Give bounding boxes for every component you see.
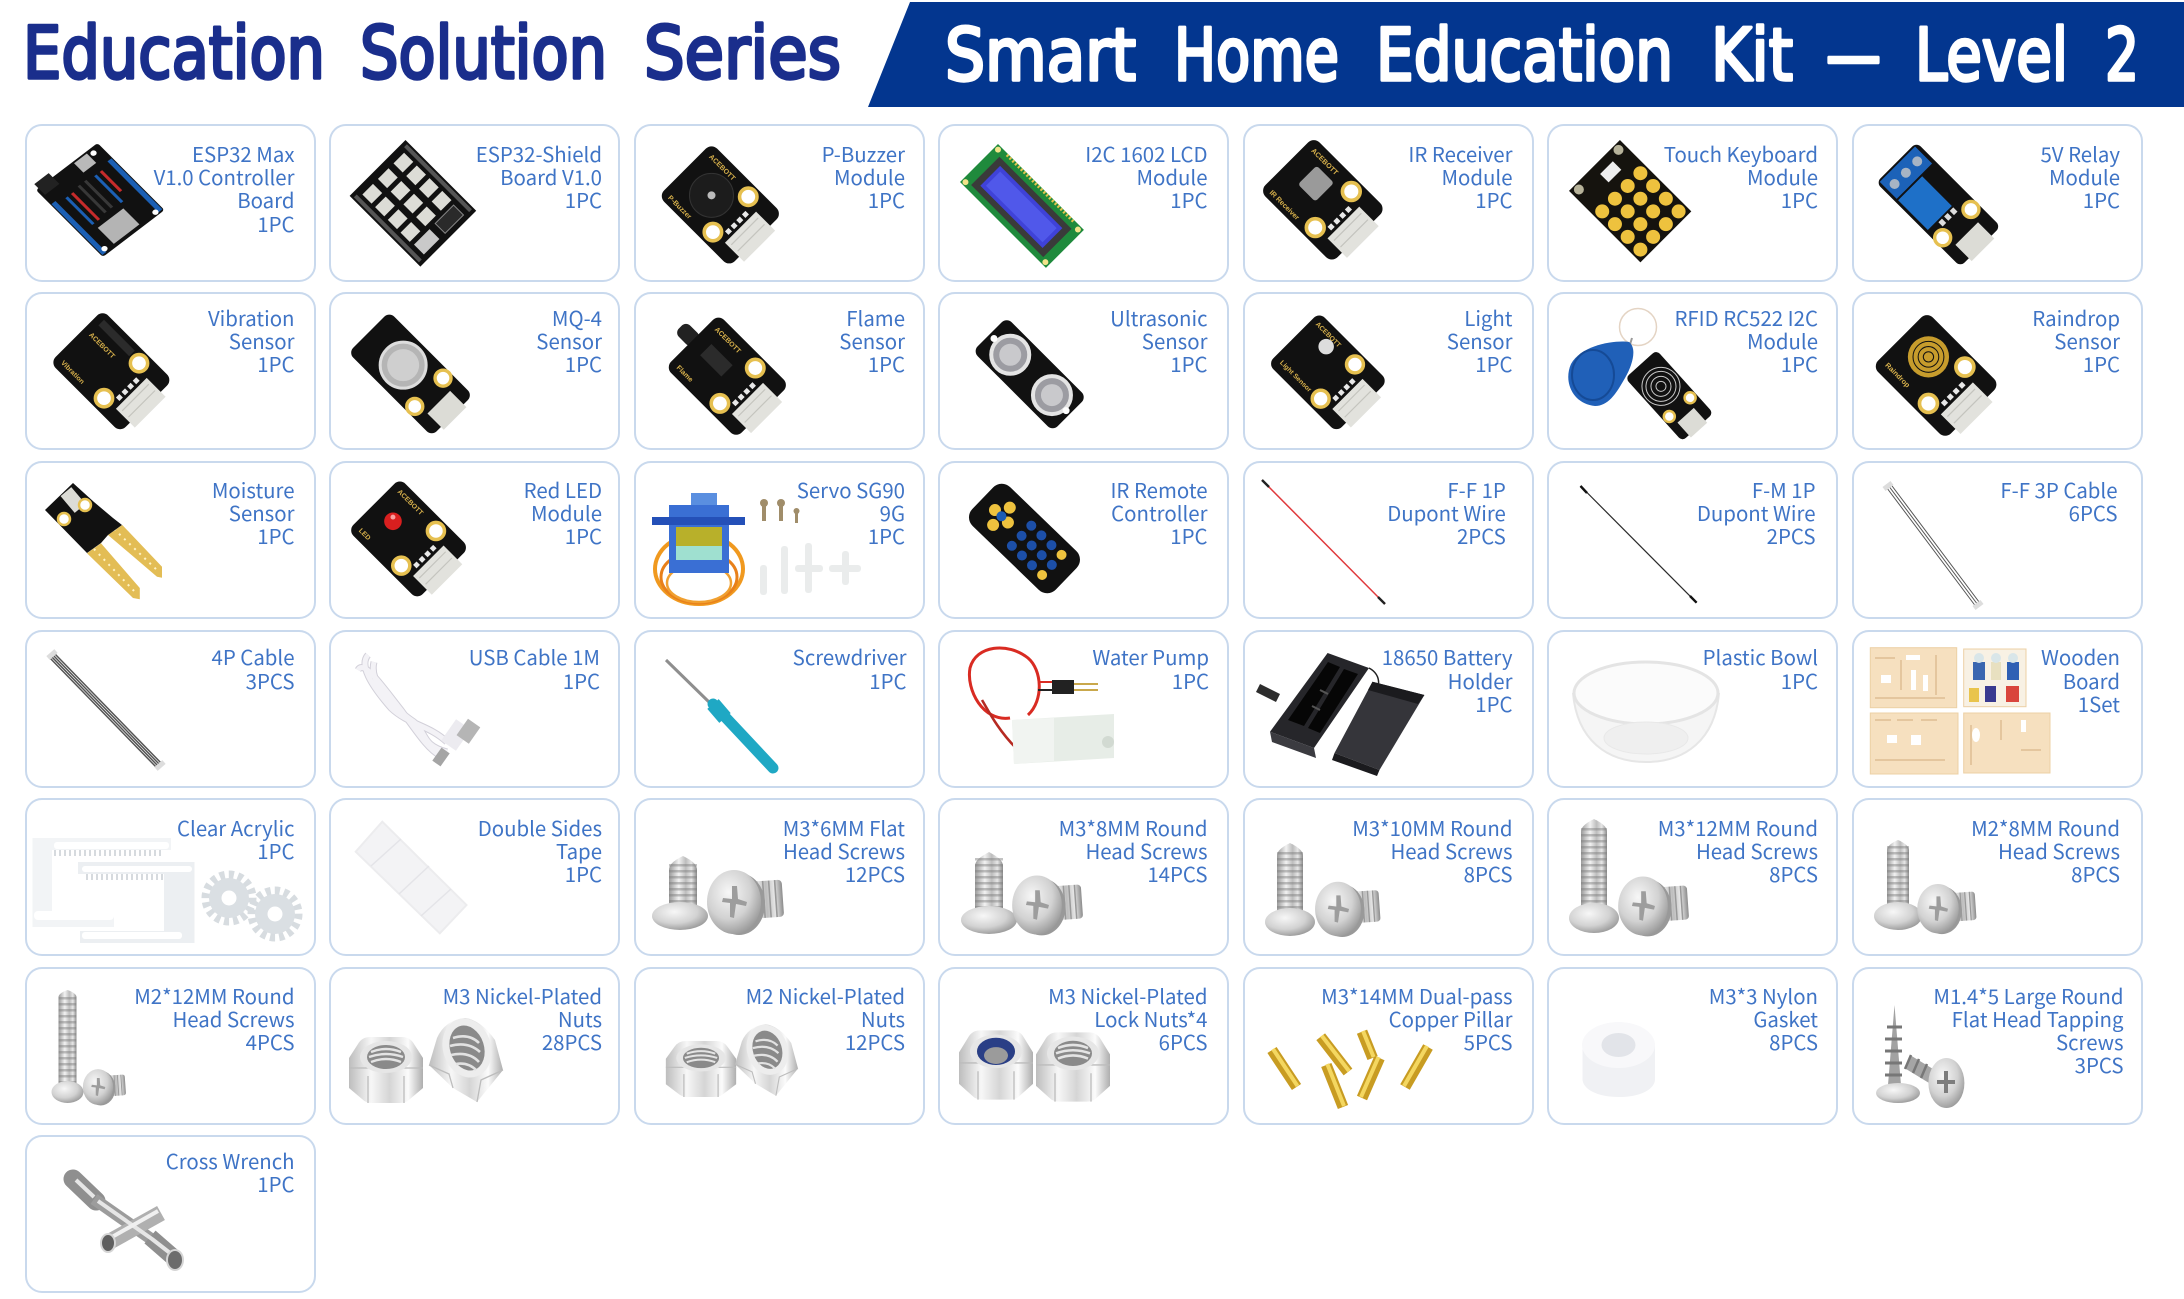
icon: IR receiver board: ACEBOTT <box>1310 146 1340 177</box>
icon: flame board: ACEBOTT <box>713 326 742 355</box>
icon: remote control <box>968 484 1080 594</box>
label <box>1709 984 1818 1053</box>
panel: Flame Sensor <box>634 292 924 450</box>
panel: M3*3 Nylon Gasket <box>1547 967 1838 1125</box>
label: Controller <box>1111 497 1208 527</box>
label: 1PC <box>565 520 602 550</box>
icon: flame board <box>668 318 786 435</box>
label: MQ-4 <box>552 302 602 332</box>
label: Lock Nuts*4 <box>1094 1003 1208 1033</box>
icon: screws <box>938 798 1228 956</box>
icon: IR receiver board: IR Receiver <box>1268 188 1301 221</box>
panel: IR Receiver <box>1242 124 1534 282</box>
label <box>208 302 295 378</box>
label <box>793 645 906 692</box>
label <box>177 816 294 862</box>
heading: Smart Home Education Kit - Level 2: Home <box>1174 13 1339 97</box>
label: Plastic Bowl <box>1703 641 1818 671</box>
icon: MQ-4 board <box>351 314 470 434</box>
panel: Touch Keyboard <box>1547 124 1838 282</box>
label <box>783 816 905 886</box>
label: 3PCS <box>2075 1049 2124 1079</box>
label: 1PC <box>1172 664 1209 694</box>
label: 1PC <box>257 835 294 865</box>
label: 1PC <box>1170 520 1208 550</box>
panel: MQ-4 Sensor <box>329 292 620 450</box>
label: I2C 1602 LCD <box>1085 138 1208 168</box>
icon: acrylic pieces and gears <box>24 798 315 956</box>
label: 1PC <box>563 664 600 694</box>
label: P-Buzzer <box>822 138 905 168</box>
label: 2PCS <box>1457 520 1506 550</box>
label: Head Screws <box>1696 835 1818 865</box>
label: V1.0 Controller <box>154 161 294 191</box>
label: M3*3 Nylon <box>1709 980 1818 1010</box>
panel: M2*8MM Round Head Screws <box>1852 798 2142 956</box>
heading: Smart Home Education Kit - Level 2: 2 <box>2105 13 2139 97</box>
icon: flame board: Flame <box>675 364 694 383</box>
label: 1PC <box>1170 184 1208 214</box>
label: Dupont Wire <box>1387 497 1506 527</box>
label: 4P Cable <box>212 641 294 671</box>
icon: water pump <box>938 630 1228 788</box>
label: Flat Head Tapping <box>1952 1003 2124 1033</box>
label <box>536 302 602 378</box>
label: 18650 Battery <box>1382 641 1512 671</box>
label: M3*14MM Dual-pass <box>1321 980 1512 1010</box>
icon: four wire cable <box>24 630 315 788</box>
label: M1.4*5 Large Round <box>1933 980 2124 1010</box>
label: 4PCS <box>246 1026 294 1056</box>
heading: Education Solution Series <box>23 11 841 95</box>
label: Module <box>2049 161 2120 191</box>
panel: F-F 1P Dupont Wire <box>1242 461 1534 619</box>
label: 1PC <box>1475 688 1512 718</box>
label: 1PC <box>565 348 602 378</box>
label: Module <box>531 497 602 527</box>
label <box>134 984 294 1053</box>
panel: M3*14MM Dual-pass Copper Pillar <box>1242 967 1534 1125</box>
icon: screws <box>24 966 315 1124</box>
panel: Ultrasonic Sensor <box>938 292 1229 450</box>
label: 8PCS <box>1464 858 1512 888</box>
label: Clear Acrylic <box>177 812 294 842</box>
label: IR Remote <box>1110 474 1208 504</box>
panel: ESP32-Shield Board <box>329 124 620 282</box>
label <box>1092 645 1209 692</box>
label <box>166 1149 294 1195</box>
label <box>746 984 905 1053</box>
label: M2*12MM Round <box>134 980 294 1010</box>
label: Sensor <box>536 325 602 355</box>
label: 1PC <box>257 520 294 550</box>
label <box>1674 302 1818 378</box>
heading: Smart Home Education Kit - Level 2 <box>945 13 2139 97</box>
icon: wooden laser-cut sheets <box>1851 630 2142 788</box>
label: 6PCS <box>1159 1026 1208 1056</box>
label: M3*8MM Round <box>1059 812 1208 842</box>
label <box>797 474 905 550</box>
panel: Raindrop Sensor <box>1852 292 2142 450</box>
label: 1PC <box>565 858 602 888</box>
heading: Smart Home Education Kit - Level 2: Level <box>1915 13 2068 97</box>
label: 5V Relay <box>2040 138 2120 168</box>
label: M3*10MM Round <box>1352 812 1512 842</box>
label: M2*8MM Round <box>1971 812 2120 842</box>
icon: ultrasonic board <box>976 320 1084 428</box>
panel: F-M 1P Dupont Wire <box>1547 461 1838 619</box>
icon: red LED board: LED <box>356 527 371 542</box>
label <box>1933 984 2124 1076</box>
label <box>1321 984 1512 1053</box>
label: 1PC <box>868 520 905 550</box>
label: Screws <box>2056 1026 2124 1056</box>
label: Module <box>1747 325 1818 355</box>
label <box>1703 645 1818 692</box>
panel: Screwdriver <box>634 630 924 788</box>
icon: lock nuts <box>938 966 1228 1124</box>
icon: three wire cable <box>1851 460 2142 618</box>
label <box>1352 816 1512 886</box>
label: 1PC <box>257 348 294 378</box>
icon: red LED board: ACEBOTT <box>395 488 424 517</box>
label <box>2040 138 2120 214</box>
label: F-F 1P <box>1447 474 1506 504</box>
label: Sensor <box>2054 325 2120 355</box>
icon: tape pads <box>328 798 620 956</box>
label: Board <box>2063 664 2120 694</box>
icon: white USB cable <box>328 630 620 788</box>
label: Sensor <box>1447 325 1512 355</box>
panel: USB Cable 1M <box>329 630 620 788</box>
label <box>839 302 906 378</box>
label: 1Set <box>2078 688 2120 718</box>
icon: LCD module <box>960 144 1084 268</box>
panel: M3 Nickel-Plated Nuts <box>329 967 620 1125</box>
heading: Education Solution Series: Series <box>644 11 841 95</box>
icon: cross socket wrench <box>24 1134 315 1292</box>
label: M3*6MM Flat <box>783 812 905 842</box>
icon: raindrop board <box>1876 315 1996 436</box>
label <box>476 138 602 214</box>
panel: M3*6MM Flat Head Screws <box>634 798 924 956</box>
label <box>524 474 602 550</box>
label: Vibration <box>208 302 294 332</box>
label <box>1387 474 1506 550</box>
label <box>1408 138 1513 214</box>
icon: white spacer <box>1546 966 1838 1124</box>
icon: battery holder <box>1242 630 1533 788</box>
label: ESP32-Shield <box>476 138 602 168</box>
label: M3 Nickel-Plated <box>443 980 602 1010</box>
panel: Servo SG90 <box>634 461 924 619</box>
label: Light <box>1464 302 1512 332</box>
label: 8PCS <box>1769 1026 1818 1056</box>
label <box>212 474 295 550</box>
label: Moisture <box>212 474 294 504</box>
label: Module <box>1136 161 1208 191</box>
label: Head Screws <box>1085 835 1208 865</box>
panel: Moisture Sensor <box>24 461 316 619</box>
label: 8PCS <box>2071 858 2120 888</box>
label: Board V1.0 <box>500 161 602 191</box>
label: Water Pump <box>1092 641 1209 671</box>
heading: Smart Home Education Kit - Level 2: — <box>1826 13 1881 97</box>
label: Module <box>834 161 905 191</box>
icon: buzzer board: ACEBOTT <box>707 153 737 182</box>
label <box>212 645 294 692</box>
label: Gasket <box>1753 1003 1818 1033</box>
label <box>2000 478 2118 524</box>
heading: Education Solution Series: Education <box>23 11 325 95</box>
label: 12PCS <box>845 1026 905 1056</box>
label: M2 Nickel-Plated <box>746 980 905 1010</box>
label <box>1048 984 1208 1053</box>
label: M3*12MM Round <box>1658 812 1818 842</box>
heading: Smart Home Education Kit - Level 2: Kit <box>1711 13 1793 97</box>
label <box>2041 645 2120 715</box>
panel: M3*8MM Round Head Screws <box>938 798 1229 956</box>
label: 1PC <box>869 664 906 694</box>
label: IR Receiver <box>1408 138 1512 168</box>
icon: screws <box>1546 798 1838 956</box>
label: F-F 3P Cable <box>2000 474 2118 504</box>
label: ESP32 Max <box>192 138 294 168</box>
icon: red LED board <box>351 482 466 596</box>
label: Module <box>1441 161 1512 191</box>
icon: brass pillars <box>1242 966 1533 1124</box>
label: 1PC <box>1781 664 1818 694</box>
panel: Light Sensor <box>1242 292 1534 450</box>
icon: screws <box>1242 798 1533 956</box>
label: 6PCS <box>2069 497 2118 527</box>
label: 1PC <box>868 348 905 378</box>
label: 2PCS <box>1767 520 1816 550</box>
label <box>1110 302 1208 378</box>
label: 3PCS <box>246 664 294 694</box>
icon: screws <box>633 798 924 956</box>
label <box>1110 474 1208 550</box>
icon: light board: ACEBOTT <box>1314 321 1343 349</box>
label: Double Sides <box>478 812 602 842</box>
label <box>2032 302 2120 378</box>
label <box>1658 816 1818 886</box>
label: Head Screws <box>172 1003 294 1033</box>
label: Nuts <box>558 1003 602 1033</box>
panel: ESP32 Max <box>24 124 316 282</box>
header band <box>23 2 2184 107</box>
label <box>478 816 602 886</box>
label: Sensor <box>229 497 294 527</box>
label <box>1697 478 1816 548</box>
label: Nuts <box>861 1003 905 1033</box>
label: 1PC <box>257 1168 294 1198</box>
panel: P-Buzzer <box>634 124 924 282</box>
label: 12PCS <box>845 858 905 888</box>
panel: RFID RC522 I2C <box>1547 292 1838 450</box>
panel: F-F 3P Cable <box>1852 461 2142 619</box>
label: 1PC <box>1475 348 1512 378</box>
label: 28PCS <box>542 1026 602 1056</box>
panel: Wooden Board <box>1852 630 2142 788</box>
icon: clear bowl <box>1546 630 1838 788</box>
label: Holder <box>1448 664 1512 694</box>
label <box>1382 645 1512 715</box>
label: 14PCS <box>1147 858 1208 888</box>
heading: Smart Home Education Kit - Level 2: Education <box>1376 13 1673 97</box>
label: M3 Nickel-Plated <box>1048 980 1208 1010</box>
panel: 4P Cable <box>24 630 316 788</box>
icon: IR receiver board <box>1263 140 1383 260</box>
icon: screwdriver <box>633 630 924 788</box>
label: Head Screws <box>783 835 905 865</box>
panel: Cross Wrench <box>24 1135 316 1293</box>
label <box>154 138 295 238</box>
banner background <box>868 2 2184 107</box>
label: 9G <box>880 497 905 527</box>
label: 1PC <box>257 208 294 238</box>
icon: buzzer board <box>662 146 779 264</box>
icon: shield board <box>350 140 476 267</box>
label: Sensor <box>229 325 294 355</box>
icon: tapping screws <box>1851 966 2142 1124</box>
label: Servo SG90 <box>797 474 905 504</box>
icon: light board: Light Sensor <box>1278 359 1313 394</box>
icon: relay board <box>1878 144 1998 264</box>
panel: 18650 Battery Holder <box>1242 630 1534 788</box>
label: Tape <box>556 835 602 865</box>
label: 1PC <box>868 184 905 214</box>
label <box>469 645 600 692</box>
icon: touch keypad <box>1569 140 1692 262</box>
panel: M3*10MM Round Head Screws <box>1242 798 1534 956</box>
panel: M1.4*5 Large Round Flat Head Tapping Screws <box>1852 967 2142 1125</box>
label: Flame <box>846 302 905 332</box>
label: F-M 1P <box>1752 474 1816 504</box>
icon: nuts <box>633 966 924 1124</box>
panel: M3*12MM Round Head Screws <box>1547 798 1838 956</box>
label: Wooden <box>2041 641 2120 671</box>
label <box>822 138 906 214</box>
label <box>1971 816 2120 886</box>
panel: Plastic Bowl <box>1547 630 1838 788</box>
label: 8PCS <box>1769 858 1818 888</box>
label: 1PC <box>1781 184 1818 214</box>
label <box>1664 138 1818 214</box>
heading: Smart Home Education Kit - Level 2: Smart <box>945 13 1136 97</box>
panel: Vibration Sensor <box>24 292 316 450</box>
label: Board <box>237 184 294 214</box>
panel: M2 Nickel-Plated Nuts <box>634 967 924 1125</box>
label <box>443 984 602 1053</box>
label: Red LED <box>524 474 602 504</box>
label: Sensor <box>839 325 905 355</box>
label: 5PCS <box>1464 1026 1512 1056</box>
label: Sensor <box>1142 325 1208 355</box>
label <box>1447 302 1513 378</box>
label <box>1085 138 1208 214</box>
label: 1PC <box>1781 348 1818 378</box>
label: Ultrasonic <box>1110 302 1208 332</box>
label: USB Cable 1M <box>469 641 600 671</box>
icon: buzzer board: P-Buzzer <box>666 194 693 220</box>
panel: IR Remote Controller <box>938 461 1229 619</box>
label: 1PC <box>1475 184 1512 214</box>
label: Copper Pillar <box>1389 1003 1512 1033</box>
icon: screws <box>1851 798 2142 956</box>
label: Screwdriver <box>793 641 906 671</box>
label: Dupont Wire <box>1697 497 1816 527</box>
label: Module <box>1747 161 1818 191</box>
icon: ESP32 controller <box>34 144 164 256</box>
icon: raindrop board: Raindrop <box>1883 360 1912 389</box>
label: RFID RC522 I2C <box>1674 302 1818 332</box>
icon: servo with horns and screws <box>652 493 861 606</box>
label: Raindrop <box>2032 302 2120 332</box>
panel: I2C 1602 LCD <box>938 124 1229 282</box>
icon: vibration board: ACEBOTT <box>87 331 116 360</box>
label: 1PC <box>565 184 602 214</box>
icon: black wire <box>1580 485 1698 604</box>
panel: Double Sides Tape <box>329 798 620 956</box>
panel: Red LED Module <box>329 461 620 619</box>
icon: red wire <box>1261 479 1386 605</box>
label: Head Screws <box>1390 835 1512 865</box>
panel: Clear Acrylic <box>24 798 316 956</box>
icon: moisture probe <box>45 483 162 600</box>
label: 1PC <box>1170 348 1208 378</box>
label: Cross Wrench <box>166 1145 294 1175</box>
panel: 5V Relay <box>1852 124 2142 282</box>
panel: M2*12MM Round Head Screws <box>24 967 316 1125</box>
icon: vibration board: Vibration <box>59 359 85 385</box>
icon: vibration board <box>53 313 170 430</box>
label: 1PC <box>2083 348 2120 378</box>
label: Touch Keyboard <box>1664 138 1818 168</box>
label: Head Screws <box>1998 835 2120 865</box>
icon: RFID tag and board <box>1568 308 1712 440</box>
heading: Education Solution Series: Solution <box>360 11 607 95</box>
panel: M3 Nickel-Plated Lock Nuts <box>938 967 1229 1125</box>
panel: Water Pump <box>938 630 1229 788</box>
icon: nuts <box>328 966 620 1124</box>
label <box>1059 816 1208 886</box>
label: 1PC <box>2083 184 2120 214</box>
icon: light board <box>1271 316 1385 430</box>
